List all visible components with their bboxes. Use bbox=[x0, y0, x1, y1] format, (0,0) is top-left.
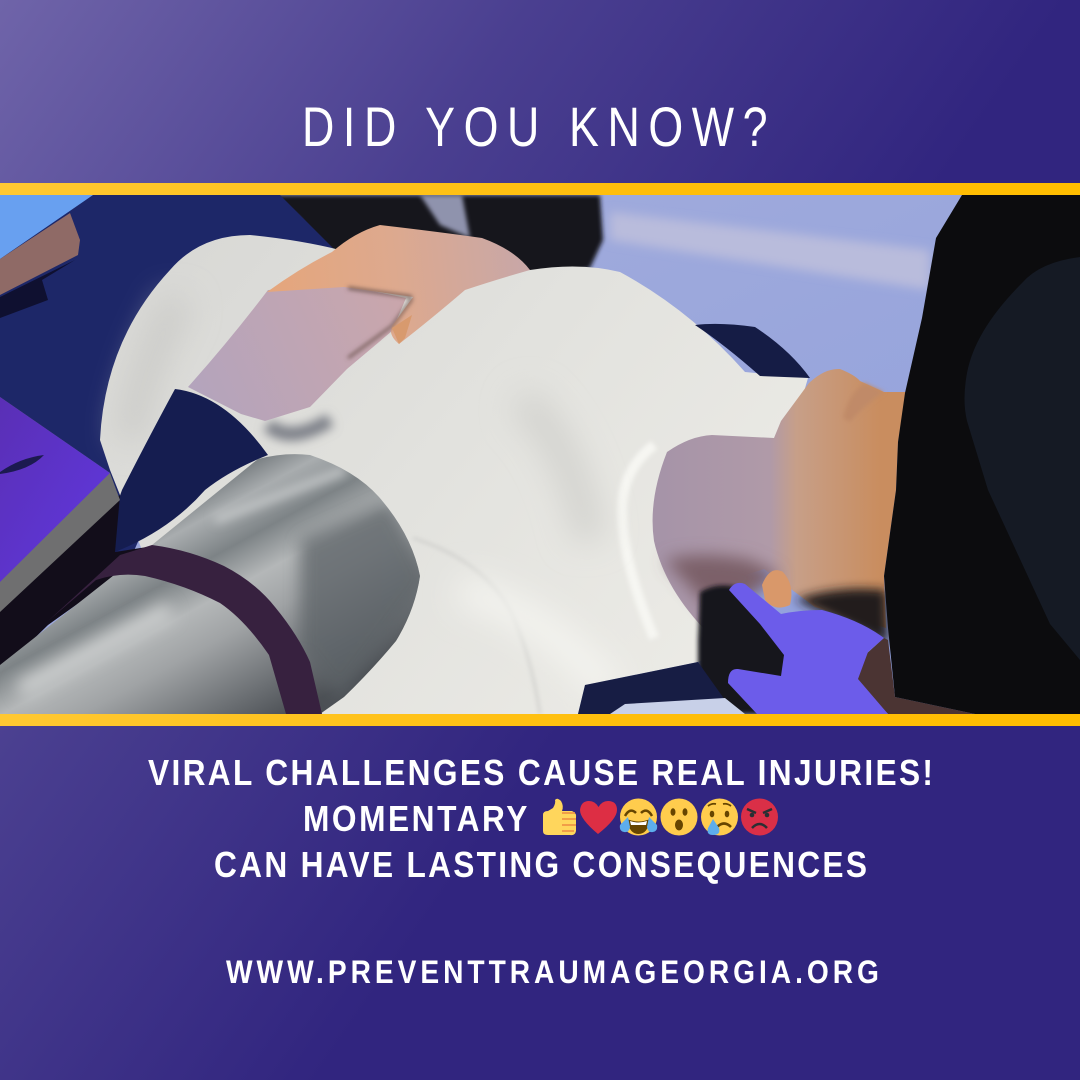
hair bbox=[698, 585, 790, 714]
top-left skin tone detail bbox=[0, 213, 80, 295]
paramedic's wrist bbox=[856, 638, 975, 714]
shirt folds and shading bbox=[130, 300, 654, 714]
paramedic's black sleeve bbox=[884, 195, 1080, 714]
dark shoes in the background bbox=[280, 195, 606, 270]
white sheet at the bottom bbox=[610, 698, 745, 714]
icon: thumbs up bbox=[543, 799, 576, 835]
headline line 3: CAN HAVE LASTING CONSEQUENCES bbox=[214, 845, 867, 885]
purple glove bbox=[728, 583, 888, 714]
cylinder strap bbox=[48, 545, 322, 714]
slit in equipment block bbox=[0, 455, 44, 474]
top-left dark detail bbox=[0, 260, 75, 318]
dark shadow behind equipment bbox=[0, 495, 146, 665]
icon: surprised face bbox=[660, 798, 698, 836]
title: DID YOU KNOW? bbox=[302, 95, 768, 158]
hand finger shadows bbox=[348, 288, 412, 358]
headline line 1: VIRAL CHALLENGES CAUSE REAL INJURIES! bbox=[148, 753, 933, 793]
neck shadow above hair bbox=[665, 555, 780, 620]
pale patch between shoes bbox=[420, 195, 470, 238]
icon: angry face bbox=[741, 798, 778, 836]
patient's upper hand bbox=[267, 225, 530, 344]
navy sleeve bbox=[114, 389, 268, 552]
bottom gold bar bbox=[0, 714, 1080, 726]
icon: tears of joy face bbox=[620, 798, 657, 836]
icon: heart bbox=[580, 801, 617, 834]
paramedic's knee bbox=[964, 257, 1080, 660]
patient's neck and face bbox=[653, 369, 906, 634]
bed surface bbox=[37, 195, 975, 714]
top-left light blue panel bbox=[0, 195, 93, 259]
icon: reaction emoji row bbox=[543, 798, 778, 836]
purple equipment block bbox=[0, 397, 120, 612]
sideburn hair bbox=[795, 589, 888, 645]
thumb nail tone bbox=[392, 315, 412, 344]
navy collar behind shoulder bbox=[695, 324, 810, 378]
navy bedding under the head bbox=[578, 662, 745, 714]
top gold bar bbox=[0, 183, 1080, 195]
pale bed stripe bbox=[610, 212, 930, 290]
ear bbox=[762, 570, 791, 608]
website url: WWW.PREVENTTRAUMAGEORGIA.ORG bbox=[226, 955, 879, 990]
patient's lower arm and hand bbox=[188, 285, 406, 421]
icon: crying face bbox=[701, 798, 738, 836]
photo: paramedic stabilising a patient's neck bbox=[0, 195, 1080, 714]
lips bbox=[843, 383, 884, 422]
navy blanket bbox=[0, 195, 334, 552]
headline line 2: MOMENTARY bbox=[303, 799, 528, 839]
white shirt bbox=[100, 235, 808, 714]
oxygen cylinder bbox=[0, 454, 430, 714]
